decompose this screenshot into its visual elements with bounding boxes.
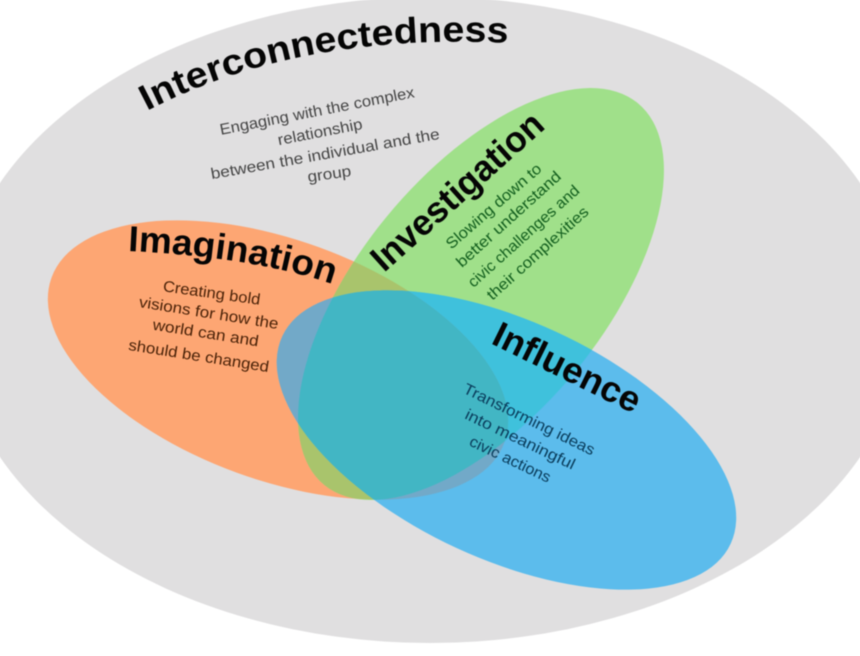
text: influence description [461,381,598,487]
overlap: influence and investigation [409,290,592,440]
heading: Interconnectedness: Interconnectedness [138,16,508,110]
text: influence description: Transforming ideas [461,381,598,459]
text: interconnectedness description [210,84,441,186]
text: imagination description: world can and [150,317,260,350]
overlapping ellipses [47,88,737,590]
text: investigation description: Slowing down to [443,160,545,253]
text: imagination description: visions for how the [138,294,280,333]
overlap: imagination and investigation [298,262,408,500]
text: investigation description [443,160,593,304]
heading: Investigation: Investigation [368,116,546,272]
text: imagination description [127,278,280,376]
overlap: all three [298,290,508,500]
text: influence description: civic actions [467,433,554,487]
text: interconnectedness description: between the individual and the [210,126,441,183]
text: investigation description: civic challenges and [465,182,583,291]
panel: influence ellipse [232,228,781,652]
text: investigation description: better understand [453,168,565,271]
text: interconnectedness description: group [306,163,352,186]
panel: imagination ellipse [10,165,546,555]
heading: Imagination: Imagination [130,226,336,284]
text: influence description: into meaningful [462,406,578,473]
text: imagination description: should be changed [127,337,270,376]
text: imagination description: Creating bold [162,278,261,309]
overlap: influence and imagination [276,298,504,500]
text: investigation description: their complexities [484,203,593,304]
text: interconnectedness description: Engaging with the complex [218,84,416,139]
heading: Influence: Influence [492,321,639,412]
text: interconnectedness description: relationship [276,116,364,149]
panel: investigation ellipse [230,26,732,562]
